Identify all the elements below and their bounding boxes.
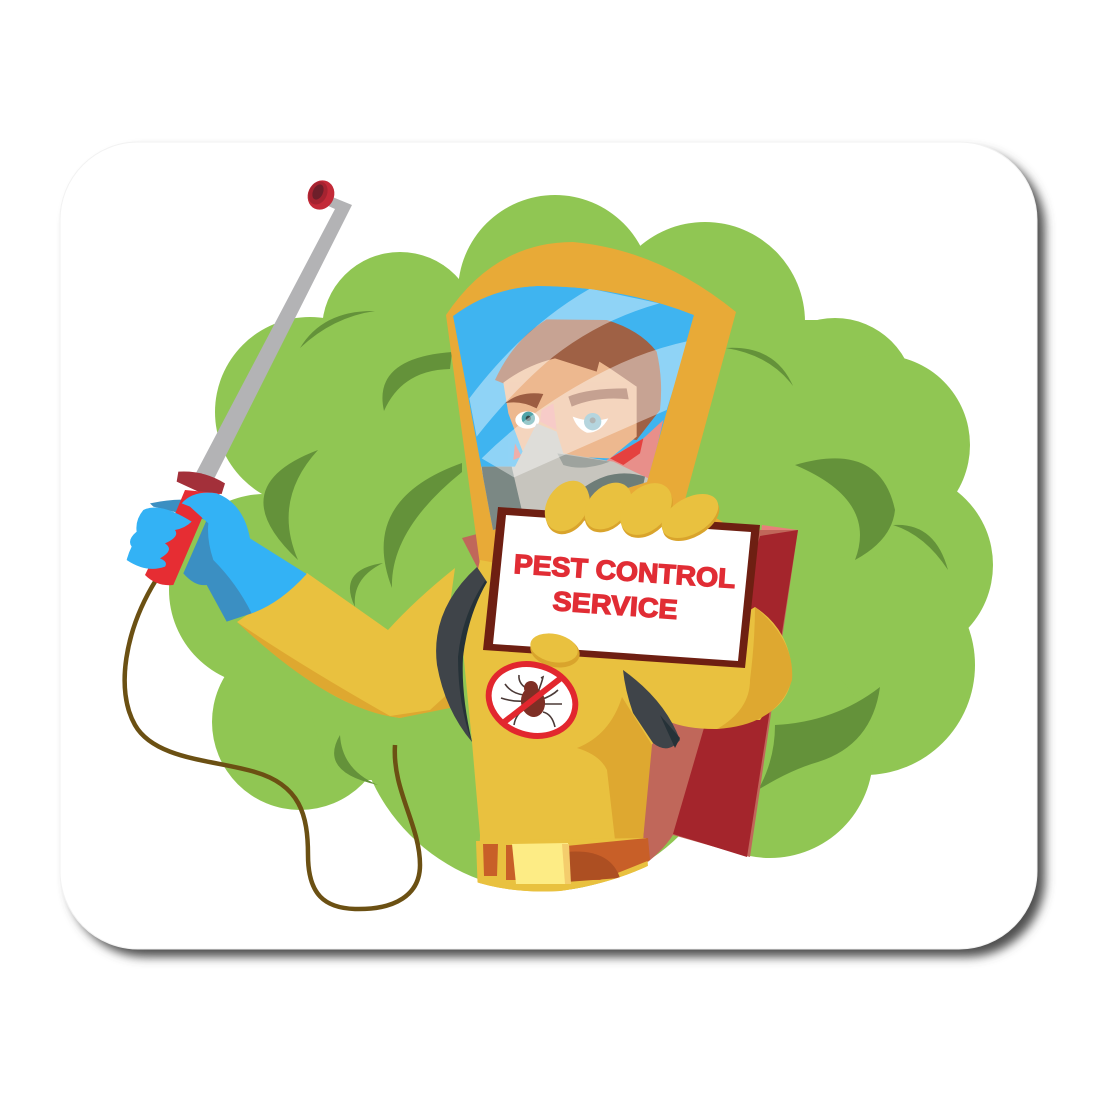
left arm bbox=[237, 568, 455, 718]
thumb bbox=[527, 629, 583, 672]
no-bug badge bbox=[480, 654, 584, 746]
prohibition bar bbox=[503, 678, 561, 723]
bug body bbox=[524, 681, 538, 695]
utility belt bbox=[476, 838, 650, 895]
nozzle bbox=[303, 176, 339, 214]
sign text: PEST CONTROL bbox=[513, 549, 736, 594]
gloved fingers bbox=[536, 473, 727, 550]
green bush bbox=[169, 195, 993, 891]
shoulder straps bbox=[436, 567, 680, 748]
face: left eye bbox=[515, 411, 539, 429]
sign board bbox=[483, 507, 760, 668]
bush leaves bbox=[263, 311, 948, 790]
spray hose bbox=[125, 580, 420, 909]
face: nose bbox=[540, 403, 557, 430]
wand pipe bbox=[196, 196, 352, 481]
visor with face bbox=[453, 286, 694, 540]
sign text: SERVICE bbox=[552, 586, 679, 625]
suit shadow fold bbox=[577, 697, 652, 840]
face: right eye bbox=[573, 417, 608, 433]
sign text bbox=[513, 549, 736, 625]
face: neck and collar bbox=[607, 420, 663, 483]
hood bbox=[446, 242, 736, 570]
glove thumb and cuff bbox=[182, 493, 307, 613]
tank backpack bbox=[462, 525, 798, 868]
visor glass reflections bbox=[469, 289, 688, 477]
handle collar bbox=[177, 471, 225, 494]
blue glove and handle bbox=[127, 471, 307, 622]
glove fingers bbox=[127, 508, 192, 569]
glove shaded back bbox=[150, 500, 252, 622]
face: eyebrows bbox=[505, 393, 543, 408]
suit body bbox=[464, 560, 762, 892]
mouse pad shadow bbox=[68, 150, 1045, 957]
face: hair bbox=[495, 319, 661, 440]
respirator base bbox=[480, 423, 648, 540]
handle grip bbox=[145, 490, 220, 585]
bug legs bbox=[501, 675, 562, 727]
face: skin bbox=[503, 358, 637, 458]
right arm holding sign bbox=[623, 607, 792, 729]
mouse pad bbox=[60, 142, 1037, 949]
respirator shoulder bbox=[482, 467, 523, 533]
